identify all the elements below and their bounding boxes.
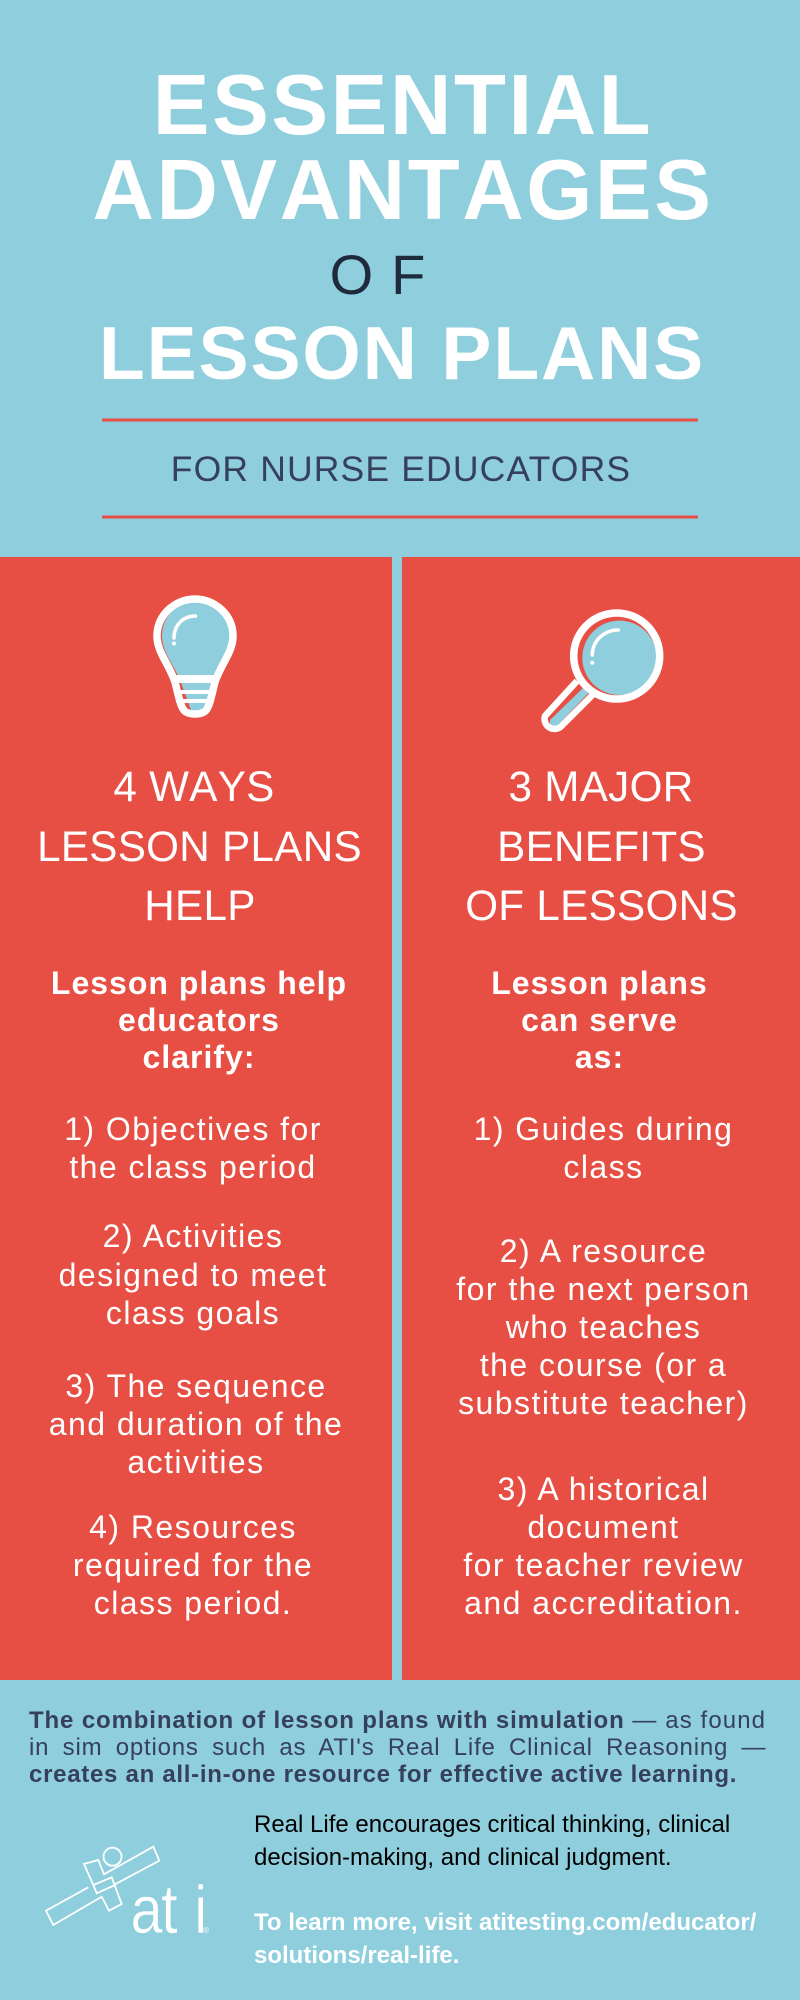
callout text: in sim options such as ATI's Real Life Clinical Reasoning — xyxy=(29,1734,766,1761)
intro: can serve xyxy=(521,1002,678,1038)
list item 3: and duration of the xyxy=(49,1406,343,1442)
icon: magnifying glass xyxy=(545,613,660,729)
list item 2 xyxy=(59,1218,327,1331)
icon: light bulb xyxy=(157,599,233,714)
title: ESSENTIAL xyxy=(153,58,653,153)
closing text: solutions/real-life. xyxy=(254,1942,459,1969)
intro xyxy=(491,965,708,1075)
intro: Lesson plans help xyxy=(51,965,347,1001)
heading: BENEFITS xyxy=(497,823,706,870)
heading xyxy=(465,763,738,929)
list item 3: 3) The sequence xyxy=(65,1368,327,1404)
intro: educators xyxy=(118,1002,280,1038)
panel: 4 ways xyxy=(0,557,392,1680)
callout text: The combination of lesson plans with simulation — as found xyxy=(29,1707,766,1734)
heading: HELP xyxy=(144,882,256,929)
panel: 3 benefits xyxy=(402,557,800,1680)
list item 3 xyxy=(463,1471,744,1621)
list item 1: 1) Guides during xyxy=(474,1111,733,1147)
logo: ATI: ® xyxy=(203,1926,209,1935)
logo: ATI: i xyxy=(194,1873,207,1948)
list item 4: required for the xyxy=(73,1547,313,1583)
callout text xyxy=(29,1707,766,1788)
heading: 3 MAJOR xyxy=(509,763,693,810)
list item 3 xyxy=(49,1368,343,1480)
callout text: creates an all-in-one resource for effective active learning. xyxy=(29,1761,737,1788)
heading: OF LESSONS xyxy=(465,882,738,929)
list item 3: 3) A historical xyxy=(497,1471,710,1507)
heading xyxy=(37,763,362,929)
footer xyxy=(29,1707,766,1969)
list item 2 xyxy=(456,1233,751,1421)
list item 2: 2) Activities xyxy=(103,1218,283,1254)
list item 2: 2) A resource xyxy=(500,1233,707,1269)
title: LESSON PLANS xyxy=(99,311,705,395)
list item 4: 4) Resources xyxy=(89,1509,297,1545)
heading: 4 WAYS xyxy=(113,763,275,810)
closing text: To learn more, visit atitesting.com/educator/ xyxy=(254,1909,757,1936)
list item 1: 1) Objectives for xyxy=(64,1111,322,1147)
subtitle: FOR NURSE EDUCATORS xyxy=(171,449,631,489)
intro: Lesson plans xyxy=(491,965,708,1001)
list item 4: class period. xyxy=(94,1585,292,1621)
list item 2: who teaches xyxy=(505,1309,701,1345)
list item 3: activities xyxy=(127,1444,265,1480)
list item 3: for teacher review xyxy=(463,1547,744,1583)
list item 3: and accreditation. xyxy=(464,1585,743,1621)
intro xyxy=(51,965,347,1075)
list item 1: class xyxy=(563,1149,644,1185)
heading: LESSON PLANS xyxy=(37,823,362,870)
closing text xyxy=(254,1811,757,1969)
closing text: Real Life encourages critical thinking, clinical xyxy=(254,1811,730,1838)
list item 2: class goals xyxy=(106,1295,280,1331)
title: OF xyxy=(330,243,443,306)
list item 1 xyxy=(64,1111,322,1185)
title xyxy=(92,58,714,395)
list item 2: designed to meet xyxy=(59,1257,327,1293)
list item 2: for the next person xyxy=(456,1271,751,1307)
logo: ATI: a xyxy=(130,1873,163,1948)
title: ADVANTAGES xyxy=(92,143,714,238)
list item 4 xyxy=(73,1509,313,1621)
intro: clarify: xyxy=(143,1039,255,1075)
logo: ATI: t xyxy=(161,1869,178,1948)
closing text: decision-making, and clinical judgment. xyxy=(254,1844,672,1871)
list item 1: the class period xyxy=(69,1149,317,1185)
intro: as: xyxy=(575,1039,624,1075)
list item 3: document xyxy=(527,1509,680,1545)
list item 2: substitute teacher) xyxy=(458,1385,749,1421)
logo: ATI xyxy=(46,1847,209,1948)
list item 2: the course (or a xyxy=(480,1347,727,1383)
header xyxy=(92,58,714,518)
list item 1 xyxy=(474,1111,733,1185)
